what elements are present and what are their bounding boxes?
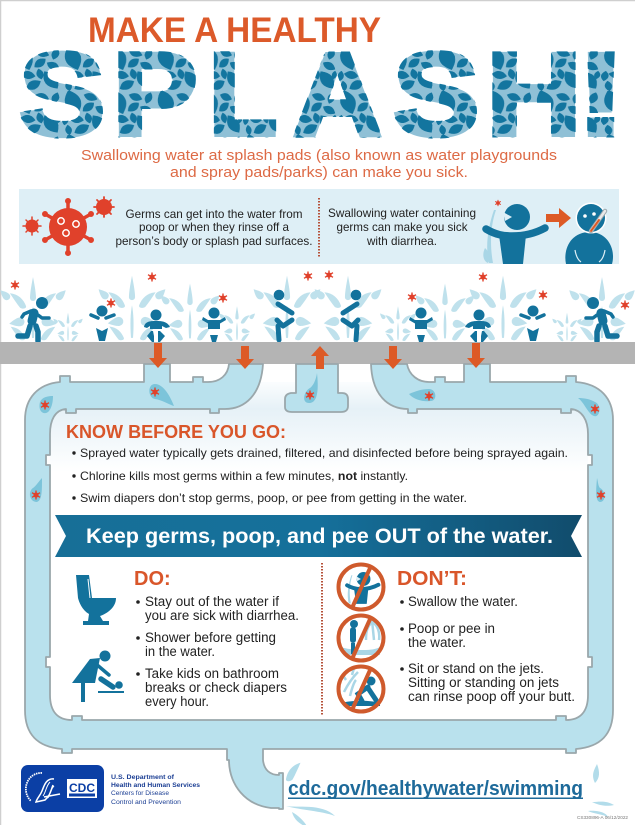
icon: hhs symbol — [26, 773, 60, 802]
icon: germs — [23, 197, 114, 256]
heading: splash made of water drops: S — [393, 29, 479, 161]
arrow — [546, 208, 571, 228]
icon: changing a diaper — [72, 650, 124, 702]
icon: toilet — [76, 575, 116, 625]
don't list: Sitting or standing on jets — [408, 675, 559, 690]
don't list: the water. — [408, 635, 466, 650]
publication code: CS330896-A 06/12/2022 — [577, 815, 629, 820]
heading: splash made of water drops: H — [486, 29, 582, 160]
heading: know before you go: KNOW BEFORE YOU GO: — [66, 421, 286, 442]
text: swallowing water: germs can make you sick — [336, 220, 468, 234]
heading: splash made of water drops: ! — [576, 29, 626, 161]
icon: no pooping — [338, 616, 384, 660]
heading: splash made of water drops: S — [19, 29, 105, 161]
banner — [55, 515, 582, 557]
children on the left — [18, 290, 292, 342]
panel: how germs spread — [19, 189, 619, 264]
orange arrows — [149, 343, 485, 369]
department text: Centers for Disease — [111, 790, 169, 797]
text: germs can get into the water: Germs can get into the water from — [126, 207, 303, 221]
department text: U.S. Department of — [111, 774, 175, 781]
subtitle: and spray pads/parks) can make you sick. — [170, 164, 468, 181]
heading: splash made of water drops: ! — [576, 29, 626, 161]
know before you go list: Chlorine kills most germs within a few minutes, not instantly. — [80, 469, 408, 483]
do list: Stay out of the water if — [145, 594, 279, 609]
do list: Shower before getting — [145, 630, 276, 645]
text: swallowing water: Swallowing water containing — [328, 206, 476, 220]
know before you go list — [72, 446, 568, 505]
do list: every hour. — [145, 694, 209, 709]
do list: Take kids on bathroom — [145, 666, 279, 681]
heading: splash made of water drops: S — [19, 29, 105, 161]
heading: splash made of water drops: P — [113, 29, 197, 161]
department text: Health and Human Services — [111, 782, 200, 789]
subtitle: Swallowing water at splash pads (also known as water playgrounds — [81, 147, 557, 164]
do list — [136, 594, 299, 709]
panel: don't — [338, 564, 575, 712]
heading: do: DO: — [134, 568, 171, 590]
pipes — [25, 364, 613, 809]
panel: do — [72, 568, 299, 709]
heading: make a healthy: MAKE A HEALTHY — [88, 11, 381, 50]
department text — [111, 774, 200, 806]
heading: splash made of water drops: P — [113, 29, 197, 161]
heading: don't: DON’T: — [397, 568, 467, 590]
heading: splash made of water drops: A — [293, 28, 382, 160]
heading: splash made of water drops: L — [209, 29, 277, 161]
children on the right — [343, 290, 617, 342]
don't list: Poop or pee in — [408, 621, 495, 636]
heading: splash made of water drops: L — [209, 29, 277, 161]
logo: cdc — [21, 765, 104, 812]
don't list — [400, 594, 575, 704]
know before you go list: Sprayed water typically gets drained, filtered, and disinfected before being sprayed again. — [80, 446, 568, 460]
heading: splash made of water drops: H — [486, 29, 582, 160]
do list: breaks or check diapers — [145, 680, 287, 695]
splash around the web address — [284, 763, 614, 825]
title — [19, 11, 626, 161]
heading: splash made of water drops: A — [293, 28, 382, 160]
heading: splash made of water drops: S — [393, 29, 479, 161]
germs in the spray — [11, 270, 629, 310]
text: swallowing water: with diarrhea. — [366, 234, 437, 248]
banner: Keep germs, poop, and pee OUT of the water. — [86, 525, 553, 548]
don't list: Swallow the water. — [408, 594, 518, 609]
main pipe loop — [25, 364, 613, 809]
text: germs can get into the water: person’s body or splash pad surfaces. — [116, 234, 312, 248]
subtitle — [81, 147, 557, 181]
splash row with children — [0, 270, 635, 342]
know before you go list: Swim diapers don’t stop germs, poop, or pee from getting in the water. — [80, 491, 467, 505]
department text: Control and Prevention — [111, 799, 181, 806]
centre drain pipe — [285, 364, 348, 412]
fountains — [0, 276, 635, 341]
panel background tint — [50, 382, 588, 472]
icon: no sitting on jets — [338, 666, 384, 712]
icon: no swallowing — [338, 564, 384, 610]
do list: you are sick with diarrhea. — [145, 608, 299, 623]
don't list: Sit or stand on the jets. — [408, 661, 544, 676]
text: swallowing water — [328, 206, 476, 248]
web address: cdc.gov/healthywater/swimming — [288, 778, 583, 800]
heading: splash made of water drops — [19, 28, 626, 161]
don't list: can rinse poop off your butt. — [408, 689, 575, 704]
grey pavement — [0, 342, 635, 364]
text: germs can get into the water — [116, 207, 312, 248]
text: germs can get into the water: poop or when they rinse off a — [139, 220, 289, 234]
icon: cdc box: CDC — [69, 781, 95, 795]
icon: sick child — [565, 202, 613, 264]
divider — [318, 198, 320, 258]
do list: in the water. — [145, 644, 215, 659]
divider — [321, 563, 323, 715]
drops with germs in pipes — [30, 373, 605, 502]
icon: child swallowing water — [483, 200, 545, 264]
